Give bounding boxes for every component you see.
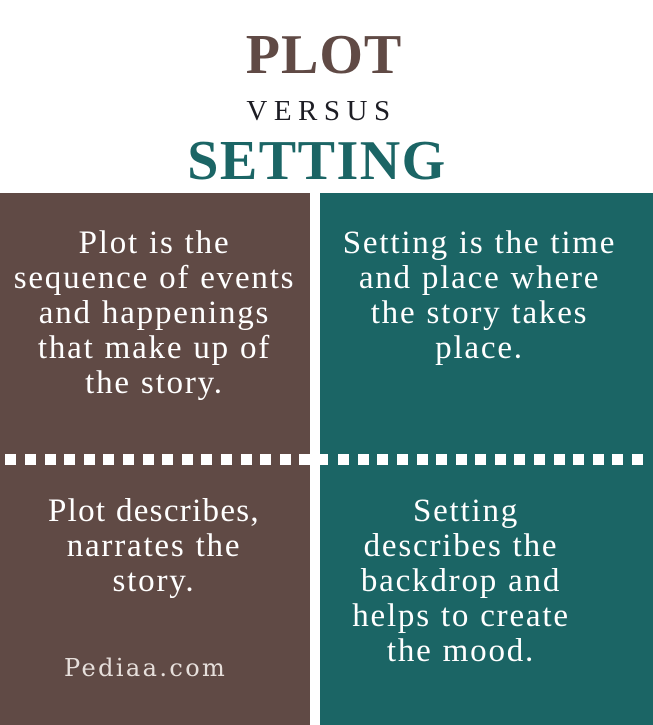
text: plot definition: the story.: [85, 365, 224, 401]
text: plot function: narrates the: [67, 528, 241, 564]
text: plot function: [48, 493, 260, 599]
dotted divider: [5, 454, 643, 465]
title: VERSUS: VERSUS: [246, 95, 397, 127]
text: setting definition: the story takes: [371, 295, 588, 331]
text: plot function: story.: [113, 563, 195, 599]
text: setting definition: Setting is the time: [343, 225, 616, 261]
title: SETTING: SETTING: [187, 130, 447, 192]
panel: setting: [320, 193, 653, 725]
panel: plot: [0, 193, 310, 725]
text: setting definition: [343, 225, 616, 366]
text: setting definition: and place where: [359, 260, 600, 296]
text: setting function: the mood.: [387, 633, 535, 669]
text: plot definition: [14, 225, 295, 401]
text: plot definition: that make up of: [38, 330, 271, 366]
text: plot definition: and happenings: [39, 295, 270, 331]
text: setting function: backdrop and: [361, 563, 561, 599]
text: plot definition: Plot is the: [79, 225, 230, 261]
text: setting function: Setting: [413, 493, 519, 529]
text: setting function: describes the: [364, 528, 558, 564]
logo: Pediaa.com: Pediaa.com: [64, 654, 227, 682]
text: setting definition: place.: [435, 330, 524, 366]
title: PLOT: PLOT: [246, 24, 402, 86]
text: setting function: [352, 493, 570, 669]
text: plot definition: sequence of events: [14, 260, 295, 296]
text: setting function: helps to create: [352, 598, 570, 634]
text: plot function: Plot describes,: [48, 493, 260, 529]
